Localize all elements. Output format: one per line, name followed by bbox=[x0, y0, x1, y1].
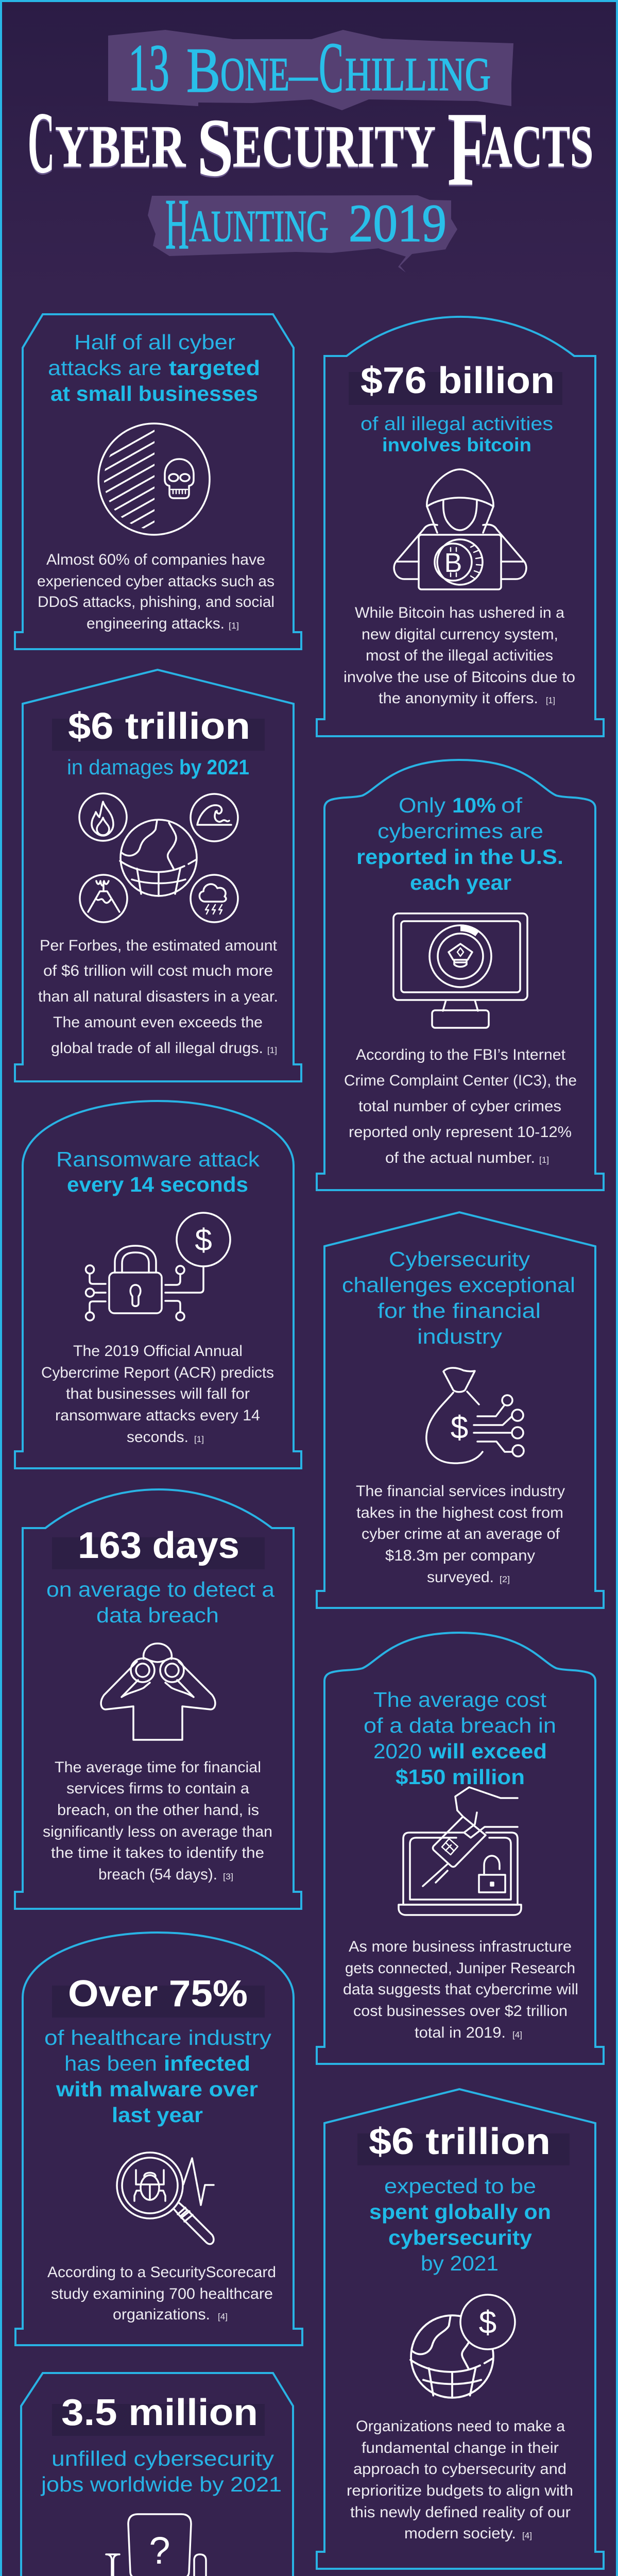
heading: cybercrimes are bbox=[377, 819, 543, 843]
body text: engineering attacks. bbox=[87, 615, 225, 632]
big number: $6 trillion bbox=[68, 706, 250, 747]
body text: services firms to contain a bbox=[66, 1780, 249, 1797]
icon: person with binoculars bbox=[101, 1643, 215, 1740]
body text: The amount even exceeds the bbox=[53, 1014, 263, 1031]
heading: 10% bbox=[452, 793, 496, 817]
heading: reported in the U.S. bbox=[356, 845, 563, 869]
body text: reprioritize budgets to align with bbox=[347, 2482, 573, 2499]
big number: $6 trillion bbox=[369, 2121, 551, 2162]
icon: money bag with circuits bbox=[426, 1368, 524, 1463]
body text: [1] bbox=[229, 621, 239, 631]
heading: Cybersecurity bbox=[389, 1247, 530, 1271]
body text: reported only represent 10-12% bbox=[349, 1124, 572, 1141]
body text: [1] bbox=[267, 1045, 277, 1055]
big number: Over 75% bbox=[68, 1973, 248, 2014]
title line: 13 Bone-Chilling: 13 bbox=[128, 31, 169, 105]
panel: 3.5 million jobs bbox=[14, 2373, 301, 2576]
icon: padlock circuit with dollar coin: $ bbox=[195, 1223, 212, 1257]
heading bbox=[44, 2026, 272, 2127]
body text bbox=[343, 1938, 578, 2041]
body text: study examining 700 healthcare bbox=[51, 2285, 273, 2302]
heading: for the financial bbox=[377, 1299, 541, 1323]
heading: will exceed bbox=[428, 1739, 547, 1763]
body text: Almost 60% of companies have bbox=[46, 551, 265, 568]
panel: $6 trillion spent globally bbox=[317, 2089, 604, 2569]
heading: has been bbox=[64, 2052, 157, 2075]
title line: 13 Bone-Chilling: C bbox=[319, 28, 344, 108]
panel frame bbox=[15, 670, 301, 1081]
heading bbox=[56, 1147, 260, 1196]
heading: challenges exceptional bbox=[342, 1273, 575, 1297]
heading: on average to detect a bbox=[46, 1578, 274, 1601]
body text: the time it takes to identify the bbox=[51, 1844, 264, 1861]
big number: 3.5 million bbox=[61, 2392, 258, 2433]
body text: According to a SecurityScorecard bbox=[47, 2264, 276, 2281]
body text: the anonymity it offers. bbox=[379, 690, 538, 707]
heading: involves bitcoin bbox=[382, 434, 531, 455]
panel: average cost of a data breach bbox=[317, 1633, 604, 2064]
body text: Cybercrime Report (ACR) predicts bbox=[41, 1364, 274, 1381]
panel frame bbox=[317, 1633, 604, 2064]
title line: Cyber Security Facts bbox=[28, 91, 593, 208]
body text: [4] bbox=[218, 2312, 228, 2321]
title line: Cyber Security Facts: S bbox=[197, 101, 233, 193]
body text: DDoS attacks, phishing, and social bbox=[38, 594, 274, 611]
icon: empty office chair with question mark bbox=[106, 2514, 206, 2576]
body text: of $6 trillion will cost much more bbox=[43, 962, 273, 979]
body text: modern society. bbox=[404, 2525, 516, 2542]
icon: padlock circuit with dollar coin bbox=[85, 1213, 230, 1320]
panel frame bbox=[317, 760, 604, 1190]
body text: [4] bbox=[522, 2531, 532, 2540]
panel: $76 billion bitcoin bbox=[317, 317, 604, 736]
heading: jobs worldwide by 2021 bbox=[41, 2472, 282, 2496]
heading bbox=[67, 755, 249, 779]
panel frame bbox=[15, 1101, 301, 1468]
body text: global trade of all illegal drugs. bbox=[51, 1040, 263, 1057]
panel frame bbox=[15, 314, 301, 649]
body text bbox=[347, 2418, 573, 2542]
title line: 13 Bone-Chilling: ONE bbox=[220, 48, 289, 100]
body text: While Bitcoin has ushered in a bbox=[355, 604, 564, 621]
body text bbox=[344, 1046, 577, 1166]
heading: of bbox=[501, 793, 523, 817]
heading bbox=[369, 2174, 551, 2275]
body text: Organizations need to make a bbox=[356, 2418, 565, 2435]
heading: expected to be bbox=[384, 2174, 536, 2198]
body text: ransomware attacks every 14 bbox=[55, 1407, 260, 1424]
body text: As more business infrastructure bbox=[349, 1938, 572, 1955]
heading bbox=[364, 1688, 556, 1789]
heading bbox=[48, 330, 260, 405]
title line: Haunting 2019: 2019 bbox=[349, 194, 447, 253]
body text: this newly defined reality of our bbox=[350, 2504, 571, 2521]
body text: experienced cyber attacks such as bbox=[37, 573, 274, 590]
body text: total in 2019. bbox=[415, 2024, 506, 2041]
body text bbox=[47, 2264, 276, 2323]
body text bbox=[43, 1759, 272, 1883]
body text: total number of cyber crimes bbox=[358, 1098, 561, 1115]
body text: fundamental change in their bbox=[362, 2439, 559, 2456]
heading: of all illegal activities bbox=[360, 413, 553, 434]
heading bbox=[360, 413, 553, 455]
title line: Cyber Security Facts: ECURITY bbox=[233, 114, 436, 180]
heading: at small businesses bbox=[50, 382, 258, 405]
body text: seconds. bbox=[127, 1429, 188, 1446]
title line: Haunting 2019 bbox=[165, 184, 447, 264]
icon: magnifier with bug and pulse bbox=[117, 2153, 214, 2244]
heading: industry bbox=[417, 1325, 503, 1348]
panel: $6 trillion in damages bbox=[15, 670, 301, 1081]
body text: significantly less on average than bbox=[43, 1823, 272, 1840]
icon: skull in hatched circle bbox=[97, 422, 211, 536]
body text: that businesses will fall for bbox=[66, 1385, 250, 1402]
body text: of the actual number. bbox=[385, 1149, 535, 1166]
icon: monitor with police hat bbox=[393, 913, 527, 1028]
body text: The 2019 Official Annual bbox=[73, 1343, 243, 1360]
icon: globe with natural disasters bbox=[79, 793, 238, 922]
heading: of a data breach in bbox=[364, 1714, 556, 1737]
big number: 163 days bbox=[78, 1525, 239, 1566]
heading: $150 million bbox=[396, 1765, 525, 1789]
body text: [3] bbox=[223, 1872, 233, 1882]
big number: $76 billion bbox=[360, 360, 555, 401]
heading: Only bbox=[399, 793, 446, 817]
body text bbox=[41, 1343, 274, 1446]
banner: top bbox=[108, 30, 513, 110]
title line: Cyber Security Facts: F bbox=[448, 91, 489, 208]
heading bbox=[46, 1578, 274, 1627]
title line: 13 Bone-Chilling: – bbox=[289, 48, 318, 100]
panel frame bbox=[15, 1933, 302, 2345]
icon: globe with dollar coin bbox=[410, 2295, 515, 2398]
body text: According to the FBI’s Internet bbox=[356, 1046, 566, 1063]
body text bbox=[356, 1483, 565, 1586]
body text: organizations. bbox=[113, 2306, 210, 2323]
heading: of healthcare industry bbox=[44, 2026, 272, 2049]
body text: [4] bbox=[512, 2030, 522, 2040]
body text: The average time for financial bbox=[55, 1759, 261, 1776]
panel: only 10% reported bbox=[317, 760, 604, 1190]
banner: bottom bbox=[148, 195, 457, 273]
heading bbox=[342, 1247, 575, 1348]
panel: over 75% healthcare bbox=[15, 1933, 302, 2345]
title line: Haunting 2019: AUNTING bbox=[189, 201, 329, 251]
heading: unfilled cybersecurity bbox=[52, 2447, 274, 2470]
panel frame bbox=[317, 1212, 604, 1608]
panel frame bbox=[14, 2373, 301, 2576]
body text: [1] bbox=[546, 696, 555, 705]
body text: takes in the highest cost from bbox=[356, 1504, 563, 1521]
title line: 13 Bone-Chilling: HILLING bbox=[345, 48, 491, 100]
body text: approach to cybersecurity and bbox=[353, 2461, 566, 2478]
body text: [1] bbox=[194, 1434, 204, 1444]
body text: gets connected, Juniper Research bbox=[345, 1960, 575, 1977]
body text: $18.3m per company bbox=[385, 1547, 535, 1564]
heading: The average cost bbox=[373, 1688, 547, 1711]
icon: hacker with bitcoin laptop bbox=[394, 469, 526, 589]
heading: 2020 bbox=[373, 1739, 422, 1763]
panel frame bbox=[317, 2089, 604, 2569]
heading: by 2021 bbox=[421, 2251, 499, 2275]
body text: Crime Complaint Center (IC3), the bbox=[344, 1072, 577, 1089]
title line: 13 Bone-Chilling bbox=[128, 28, 491, 108]
body text: new digital currency system, bbox=[362, 626, 558, 643]
body text: surveyed. bbox=[427, 1569, 494, 1586]
body text bbox=[344, 604, 575, 707]
panel: 163 days bbox=[15, 1489, 301, 1909]
body text: [1] bbox=[539, 1155, 549, 1165]
heading: by 2021 bbox=[179, 755, 249, 779]
heading: attacks are bbox=[48, 356, 162, 380]
heading: infected bbox=[164, 2052, 250, 2075]
title line: 13 Bone-Chilling: B bbox=[186, 35, 220, 106]
body text bbox=[38, 937, 278, 1057]
panel frame bbox=[317, 317, 604, 736]
body text: breach, on the other hand, is bbox=[57, 1802, 259, 1819]
heading: cybersecurity bbox=[388, 2226, 532, 2249]
heading: Half of all cyber bbox=[74, 330, 235, 354]
icon: empty office chair with question mark: ? bbox=[149, 2529, 170, 2572]
big number bbox=[52, 1525, 265, 1569]
heading: targeted bbox=[169, 356, 260, 380]
icon: money bag with circuits: $ bbox=[451, 1410, 468, 1446]
heading: with malware over bbox=[56, 2077, 258, 2101]
panel: ransomware attack bbox=[15, 1101, 301, 1468]
icon: hacker with bitcoin laptop: B bbox=[444, 548, 462, 578]
heading: in damages bbox=[67, 755, 174, 779]
body text: breach (54 days). bbox=[98, 1866, 217, 1883]
body text: data suggests that cybercrime will bbox=[343, 1981, 578, 1998]
heading: each year bbox=[410, 871, 511, 894]
heading: spent globally on bbox=[369, 2200, 551, 2224]
heading bbox=[41, 2447, 282, 2496]
title line: Cyber Security Facts: YBER bbox=[55, 114, 186, 180]
body text: most of the illegal activities bbox=[366, 647, 553, 664]
body text: Per Forbes, the estimated amount bbox=[40, 937, 278, 954]
body text: than all natural disasters in a year. bbox=[38, 988, 278, 1005]
body text: cyber crime at an average of bbox=[362, 1526, 560, 1543]
body text: involve the use of Bitcoins due to bbox=[344, 669, 575, 686]
body text: The financial services industry bbox=[356, 1483, 565, 1500]
panel frame bbox=[15, 1489, 301, 1909]
icon: laptop with credit card and hand bbox=[399, 1787, 521, 1915]
heading: every 14 seconds bbox=[67, 1173, 248, 1196]
body text: [2] bbox=[500, 1574, 510, 1584]
heading: data breach bbox=[96, 1603, 219, 1627]
body text: cost businesses over $2 trillion bbox=[353, 2003, 568, 2020]
icon: globe with dollar coin: $ bbox=[479, 2305, 496, 2341]
heading: last year bbox=[112, 2103, 203, 2127]
panel: half of all cyber attacks bbox=[15, 314, 301, 649]
body text bbox=[37, 551, 274, 632]
heading: Ransomware attack bbox=[56, 1147, 260, 1171]
heading bbox=[356, 793, 563, 894]
title line: Haunting 2019: H bbox=[165, 184, 189, 264]
title bbox=[28, 28, 593, 273]
panel: financial industry bbox=[317, 1212, 604, 1608]
title line: Cyber Security Facts: C bbox=[28, 94, 55, 191]
